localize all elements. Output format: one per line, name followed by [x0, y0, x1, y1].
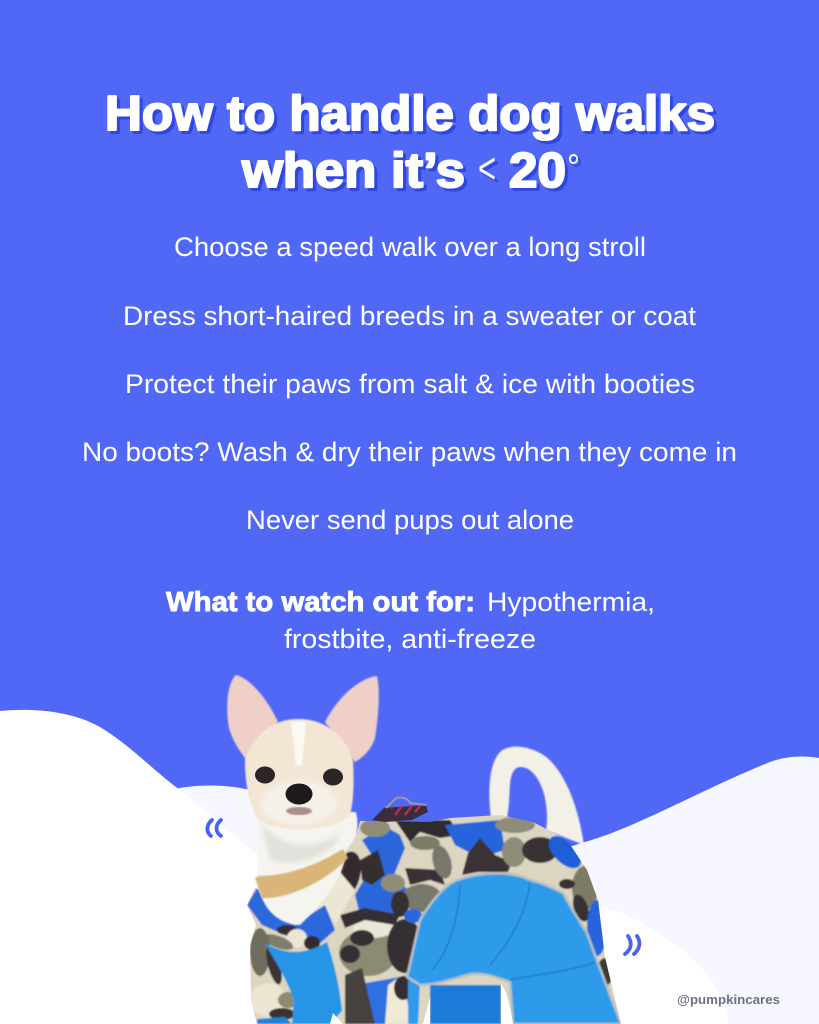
lavender hill left	[170, 786, 420, 1024]
tip 2: Dress short-haired breeds in a sweater or coat	[123, 301, 697, 331]
neck and chest	[257, 812, 358, 925]
white hill left	[0, 710, 300, 1024]
nose	[286, 784, 312, 804]
far leg	[430, 985, 501, 1024]
front leg strip	[408, 980, 420, 1024]
watch out callout: frostbite, anti-freeze	[284, 624, 536, 654]
mouth	[286, 807, 312, 815]
watch out callout: Hypothermia,	[487, 587, 655, 617]
coat	[240, 810, 630, 1024]
right eye	[323, 768, 343, 786]
cuff	[257, 1017, 292, 1024]
icon: motion marks left	[207, 820, 221, 836]
camo patches	[247, 817, 613, 1024]
head blaze	[291, 722, 306, 765]
tip 1: Choose a speed walk over a long stroll	[174, 232, 646, 262]
lavender hill right	[400, 757, 819, 1024]
belly and hind leg panel	[407, 873, 621, 1024]
left eye	[255, 766, 275, 784]
front chest panel	[265, 942, 342, 1024]
head	[245, 719, 354, 829]
left ear	[227, 675, 278, 762]
title: <	[478, 144, 496, 193]
title: when it’s	[241, 144, 465, 198]
watch out callout: What to watch out for:	[166, 586, 475, 617]
tip 3: Protect their paws from salt & ice with booties	[125, 369, 695, 399]
icon: motion marks right	[625, 936, 639, 954]
right ear	[325, 676, 379, 762]
white hill right	[330, 905, 728, 1024]
tip 4: No boots? Wash & dry their paws when they come in	[82, 437, 737, 467]
harness handle	[372, 798, 428, 822]
title: 20	[509, 144, 566, 198]
tip 5: Never send pups out alone	[246, 505, 574, 535]
collar	[255, 849, 348, 898]
title: °	[567, 146, 580, 187]
dog in camo coat	[227, 675, 630, 1024]
handle credit: @pumpkincares	[677, 992, 780, 1007]
snow hills	[0, 710, 819, 1024]
title: How to handle dog walks	[105, 87, 715, 141]
dog tail	[489, 747, 584, 845]
muzzle	[261, 781, 337, 825]
watch out callout	[166, 586, 655, 654]
title	[105, 87, 715, 198]
tips list	[82, 232, 737, 535]
